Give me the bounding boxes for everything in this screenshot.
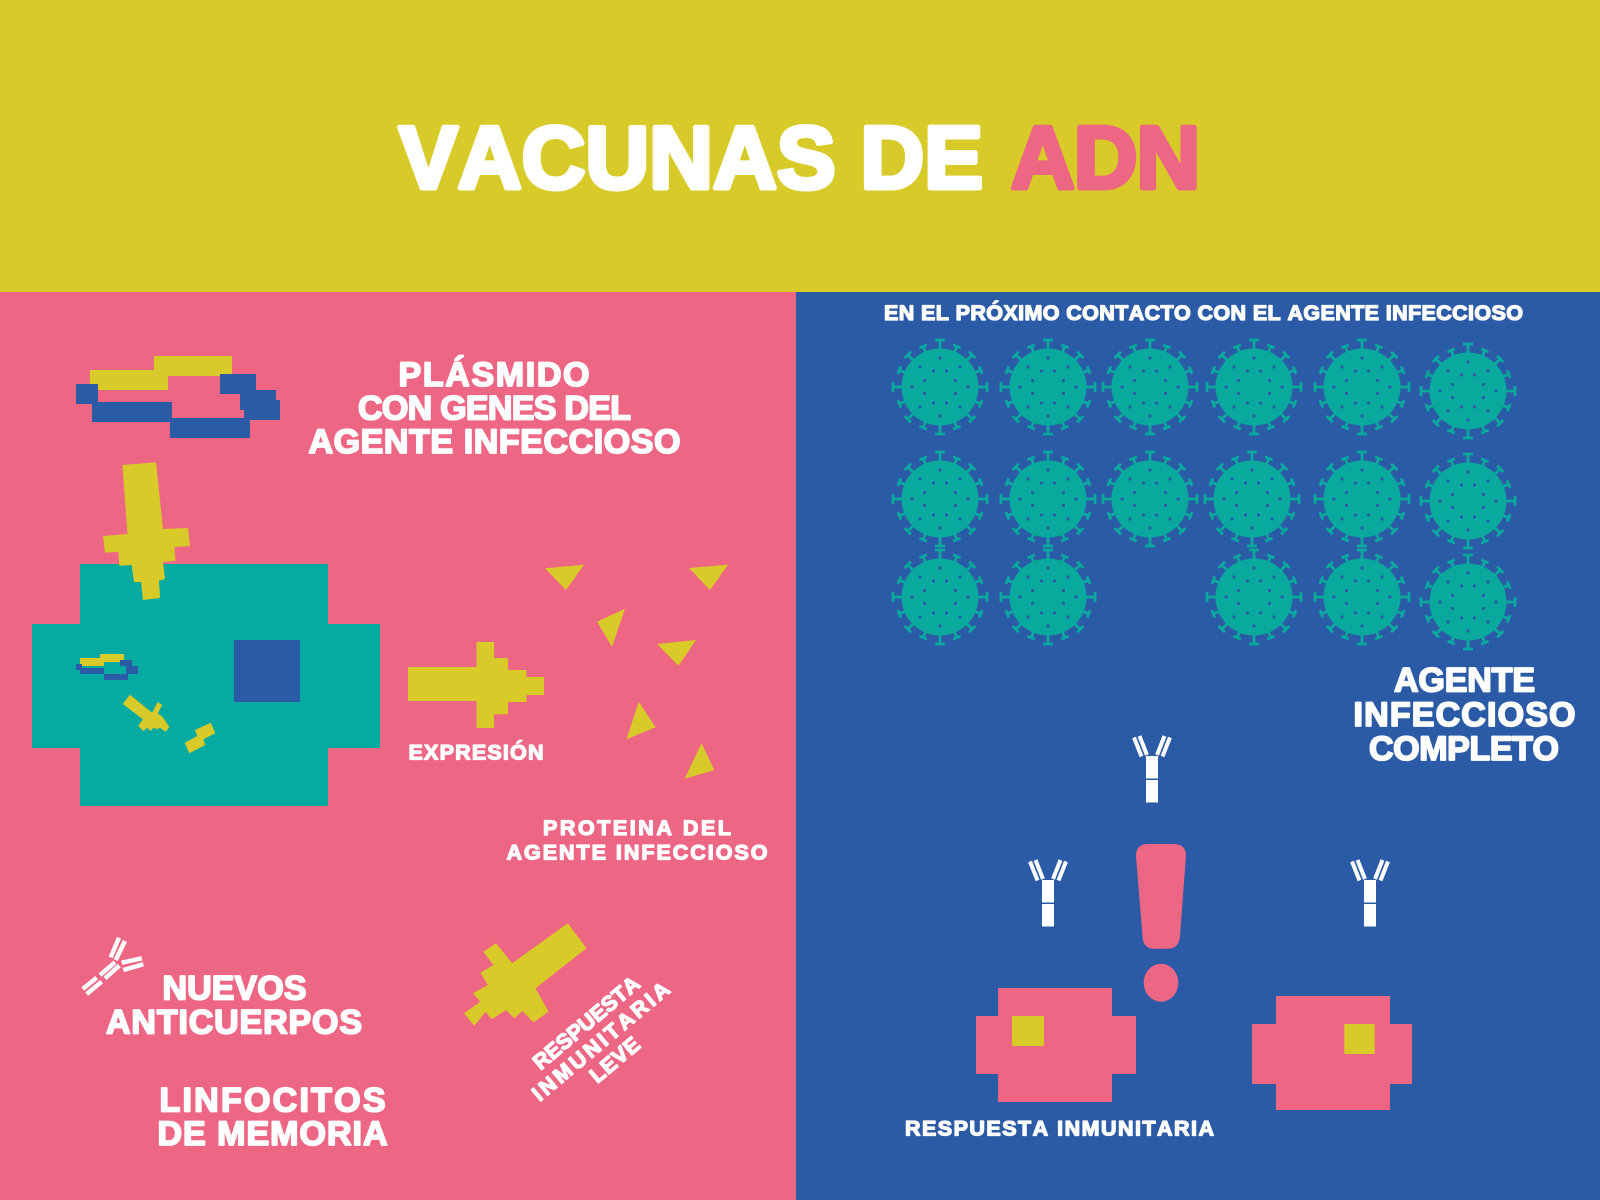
label: protein of the infectious agent bbox=[506, 816, 768, 864]
icon: protein triangles bbox=[545, 565, 728, 779]
heading: plasmid label: CON GENES DEL bbox=[358, 390, 631, 428]
label: immune response: RESPUESTA INMUNITARIA bbox=[905, 1116, 1214, 1140]
icon: protein fragment inside the cell bbox=[185, 723, 215, 753]
label: complete infectious agent bbox=[1354, 662, 1576, 768]
label: complete infectious agent: INFECCIOSO bbox=[1354, 696, 1576, 734]
heading: plasmid label: PLÁSMIDO bbox=[398, 356, 590, 394]
panel: left pink DNA vaccine process bbox=[0, 292, 796, 1200]
heading: next contact with the infectious agent: EN EL PRÓXIMO CONTACTO CON EL AGENTE INFECCIOSO bbox=[884, 300, 1523, 325]
icon: exclamation mark bbox=[1136, 844, 1186, 1002]
label: mild immune response: LEVE bbox=[585, 1032, 645, 1088]
label: protein of the infectious agent: PROTEINA DEL bbox=[543, 816, 731, 840]
label: memory lymphocytes: LINFOCITOS bbox=[160, 1082, 386, 1120]
label: complete infectious agent: COMPLETO bbox=[1369, 730, 1559, 768]
label: mild immune response: INMUNITARIA bbox=[527, 977, 675, 1106]
label: complete infectious agent: AGENTE bbox=[1394, 662, 1535, 700]
title: ADN bbox=[1011, 108, 1200, 207]
label: expression: EXPRESIÓN bbox=[408, 740, 544, 764]
icon: antibody right bbox=[1352, 860, 1388, 926]
virus row 3 bbox=[893, 550, 1515, 649]
icon: antibody left bbox=[1030, 860, 1066, 926]
icon: plasmid inside the cell bbox=[76, 654, 138, 680]
label: protein of the infectious agent: AGENTE INFECCIOSO bbox=[506, 840, 768, 864]
label: new antibodies: NUEVOS bbox=[162, 970, 306, 1008]
label: new antibodies bbox=[106, 970, 362, 1042]
icon: antibody top bbox=[1134, 736, 1170, 802]
cell nucleus bbox=[234, 640, 300, 702]
label: new antibodies: ANTICUERPOS bbox=[106, 1004, 362, 1042]
label: mild immune response: RESPUESTA bbox=[528, 971, 645, 1075]
icon: large syringe bbox=[464, 923, 586, 1026]
panel: right blue next contact bbox=[796, 292, 1600, 1200]
chart: virus grid bbox=[893, 340, 1515, 649]
heading: plasmid label: AGENTE INFECCIOSO bbox=[308, 423, 680, 461]
label: memory lymphocytes bbox=[158, 1082, 388, 1153]
virus row 2 bbox=[893, 452, 1515, 548]
cell: teal host cell bbox=[32, 564, 380, 806]
icon: rotated antibody bbox=[83, 938, 143, 994]
title: VACUNAS DE bbox=[399, 108, 983, 207]
icon: small syringe inside the cell bbox=[123, 695, 169, 732]
label: memory lymphocytes: DE MEMORIA bbox=[158, 1115, 388, 1153]
heading: plasmid label bbox=[308, 356, 680, 461]
virus row 1 bbox=[893, 340, 1515, 438]
cell: pink immune cell left bbox=[976, 988, 1136, 1102]
panel: header band bbox=[0, 0, 1600, 292]
icon: syringe injecting plasmid bbox=[103, 462, 190, 600]
cell: pink immune cell right bbox=[1252, 996, 1412, 1110]
arrow: expression bbox=[408, 642, 544, 728]
icon: plasmid bbox=[76, 356, 280, 438]
